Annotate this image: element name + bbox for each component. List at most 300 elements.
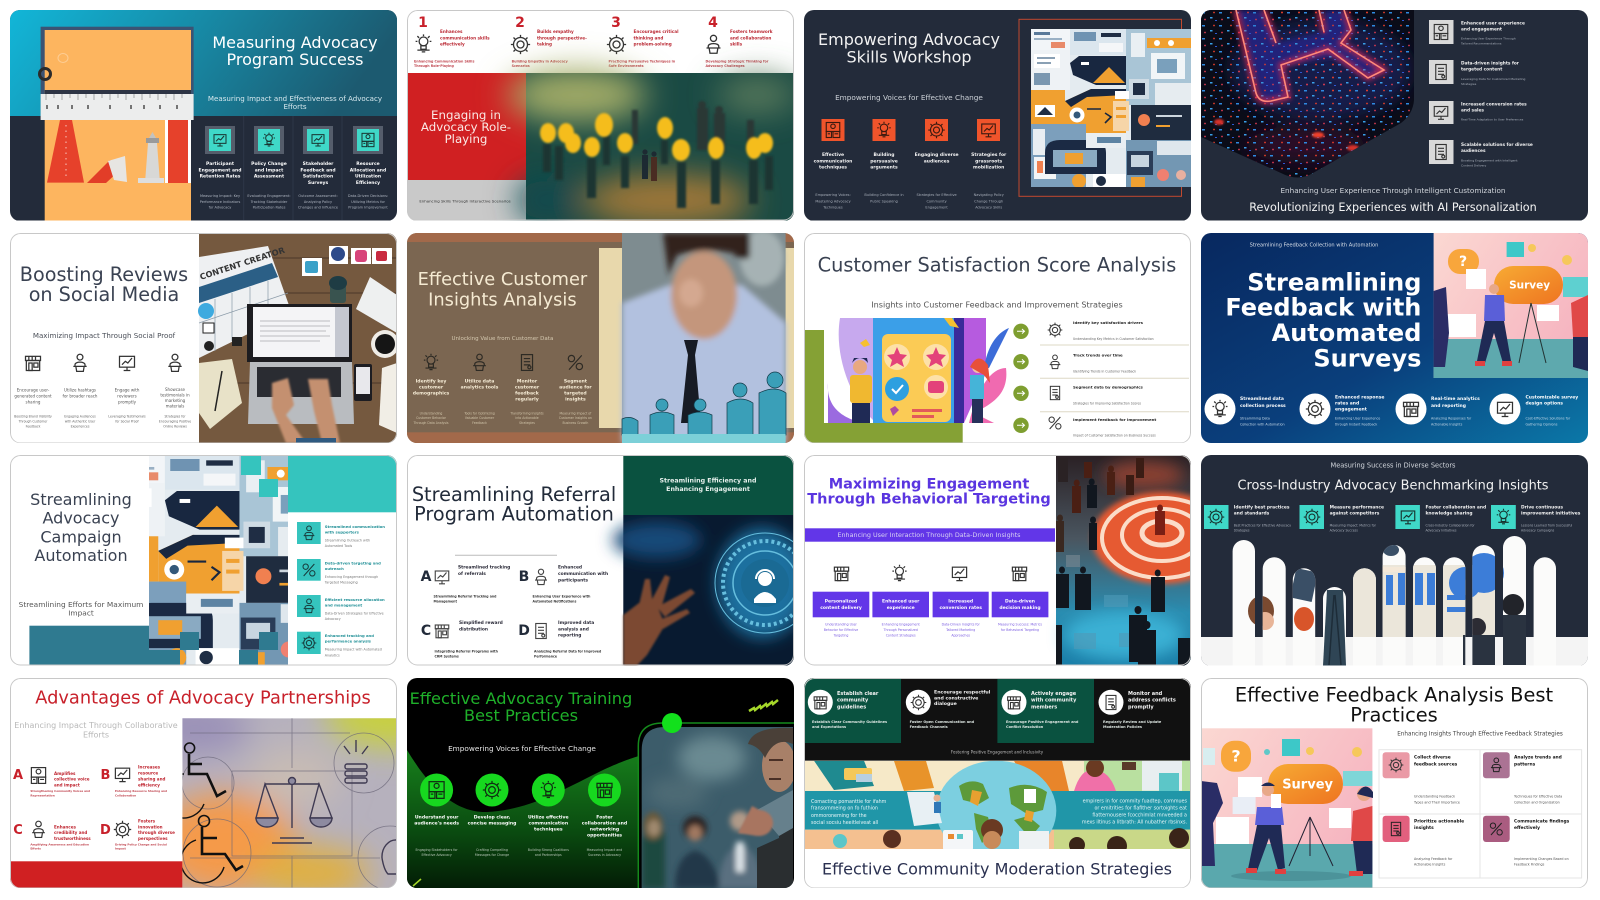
column headings: communication (529, 820, 568, 826)
title: Feedback with (1225, 293, 1421, 321)
list descriptions (1073, 336, 1156, 437)
item headings: Increases (138, 764, 161, 769)
column descriptions: Analyzing Policy (304, 200, 332, 204)
column headings: Utilize effective (528, 814, 569, 820)
title: Program Automation (414, 502, 614, 525)
panel: Effective Customer Insights Analysis (407, 233, 794, 443)
column descriptions: Performance Indicators (200, 200, 240, 204)
caption (407, 180, 526, 220)
purple boxes: Increased (948, 598, 973, 604)
column descriptions: Techniques (822, 205, 843, 209)
subtitle: Enhancing Insights Through Effective Feedback Strategies (1397, 731, 1563, 737)
tile headings: effectively (1514, 824, 1540, 830)
item descriptions: Automated Notifications (532, 599, 576, 603)
panel: Advantages of Advocacy Partnerships (10, 678, 397, 888)
garbled illustration text right: mexs iltinus a litbrath: All nubather rbsinxs. (1082, 819, 1187, 825)
panel: Streamlining Referral Program Automation (407, 455, 794, 666)
column descriptions: and Partnerships (535, 852, 562, 856)
item descriptions: Performance (534, 655, 557, 659)
letters: D (100, 823, 111, 838)
item headings: resource (138, 769, 158, 774)
column headings: regularly (515, 396, 539, 402)
icons (31, 767, 131, 838)
tip text: promptly (118, 398, 137, 403)
column headings: opportunities (587, 832, 622, 838)
title: on Social Media (29, 282, 179, 305)
feature headings: collection process (1240, 402, 1286, 408)
benefit text (440, 28, 773, 46)
feature headings: engagement (1335, 405, 1368, 411)
column descriptions: Evaluating Engagement: (247, 194, 291, 198)
garbled illustration text left: ommoroneming for the (811, 812, 867, 818)
benefit details: Developing Strategic Thinking for (706, 59, 769, 63)
headings: address conflicts (1128, 697, 1176, 703)
title: Boosting Reviews (20, 262, 188, 285)
feature descriptions: Analyzing Responses for (1431, 416, 1472, 420)
card grid (1379, 749, 1582, 878)
column headings: Satisfaction (303, 173, 333, 179)
column headings: customer (419, 384, 444, 390)
feature descriptions: Collection with Automation (1240, 422, 1285, 426)
tile headings: Communicate findings (1514, 817, 1570, 823)
headings: guidelines (837, 704, 866, 710)
column descriptions (815, 193, 1004, 209)
photo: laptop on wooden desk (198, 232, 399, 444)
column headings: networking (590, 826, 619, 832)
item headings: and impact (54, 781, 80, 786)
feature descriptions: Cost-Effective Solutions for (1526, 416, 1571, 420)
tip details: Through Customer (18, 419, 48, 423)
feature descriptions: Strategies (1234, 528, 1250, 532)
benefit text: effectively (440, 41, 465, 46)
illustration: rating phone and people (824, 318, 1009, 422)
feature icons (297, 522, 321, 654)
tile headings (1414, 754, 1570, 830)
column headings: Monitor (517, 378, 538, 384)
feature descriptions: Streamlining Outreach with (325, 538, 370, 542)
title: Effective Community Moderation Strategies (822, 859, 1172, 878)
teal icons (1204, 505, 1516, 529)
feature headings: Real-time analytics (1431, 395, 1480, 401)
column descriptions: Outcome Assessment: (298, 194, 338, 198)
column descriptions: Measuring Impact: Key (200, 194, 240, 198)
title: Automation (34, 546, 128, 564)
column descriptions: Customer Insights on (559, 416, 592, 420)
purple boxes: conversion rates (940, 604, 982, 610)
garbled illustration text left: Comacting pomanttie for ifahm (811, 798, 887, 804)
icon row (205, 126, 383, 154)
garbled illustration text left (811, 798, 887, 826)
column descriptions: Building Strong Coalitions (528, 848, 569, 852)
column descriptions: Messages for Change (475, 852, 509, 856)
list descriptions: Identifying Trends in Customer Feedback (1073, 369, 1136, 373)
benefit details: Safe Environments (608, 64, 644, 68)
tip text: marketing (165, 397, 186, 402)
feature headings: improvement initiatives (1521, 510, 1581, 516)
title: Streamlining Referral (412, 482, 616, 506)
arrow buttons (1013, 323, 1029, 432)
title block: Advocacy Role- (421, 120, 511, 134)
column descriptions: Through Data Analysis (413, 420, 449, 424)
column headings: Surveys (308, 180, 328, 186)
tip text: Engage with (115, 387, 140, 392)
column descriptions: Data-Driven Decisions: (348, 194, 388, 198)
item headings: efficiency (138, 781, 160, 786)
title: Campaign (40, 527, 122, 546)
panel: Streamlining Feedback with Automated Surveys (1201, 233, 1588, 443)
column descriptions: Public Speaking (870, 199, 898, 203)
feature icons (1429, 20, 1454, 164)
item descriptions: Analyzing Referral Data for Improved (534, 649, 602, 653)
column headings: communication (814, 158, 852, 164)
tip text: testimonials in (160, 392, 190, 397)
column descriptions (200, 194, 388, 210)
letters: B (519, 569, 529, 585)
tip text: reviewers (117, 393, 137, 398)
title: Revolutionizing Experiences with AI Personalization (1249, 201, 1537, 214)
benefit text: communication skills (440, 35, 490, 40)
headings: Actively engage (1031, 690, 1077, 696)
title: Cross-Industry Advocacy Benchmarking Insights (1237, 478, 1549, 494)
list descriptions: Understanding Key Metrics in Customer Satisfaction (1073, 336, 1154, 340)
image: neon letter R on circuit board (1201, 10, 1414, 182)
purple boxes: Enhanced user (882, 598, 920, 604)
column headings: Identify key (416, 378, 446, 384)
feature headings: Identify best practices (1234, 504, 1290, 510)
tile descriptions: Techniques for Effective Data (1513, 794, 1562, 798)
column descriptions: Measuring Impact and (587, 848, 622, 852)
title: Effective Feedback Analysis Best (1235, 683, 1554, 706)
subtitle: Efforts (283, 102, 307, 110)
box descriptions: Through Personalized (883, 628, 918, 632)
column descriptions: Customer Behavior (416, 416, 447, 420)
descriptions: Regularly Review and Update (1103, 720, 1162, 724)
column headings: mobilization (973, 164, 1004, 170)
item headings: perspectives (138, 835, 168, 840)
column headings: feedback (515, 390, 540, 396)
column headings (814, 152, 1007, 170)
box descriptions: Behavior for Effective (824, 628, 858, 632)
column headings: Allocation and (350, 167, 386, 173)
benefit text: skills (730, 41, 743, 46)
panel: Measuring Advocacy Program Success (10, 10, 397, 220)
subtitle: Unlocking Value from Customer Data (451, 336, 553, 342)
panel: Cross-Industry Advocacy Benchmarking Insights (1201, 455, 1588, 666)
feature descriptions (1234, 523, 1572, 532)
column descriptions: Building Confidence in (864, 193, 904, 197)
panel: Streamlining Advocacy Campaign Automation (10, 455, 397, 666)
letters (13, 768, 111, 838)
column descriptions: Program Improvement (348, 206, 388, 210)
feature headings: design options (1526, 400, 1563, 406)
title: Customer Satisfaction Score Analysis (818, 253, 1176, 276)
feature descriptions: Tailored Recommendations (1460, 41, 1502, 45)
feature descriptions: Measuring Impact with Automated (325, 648, 382, 652)
subtitle: Enhancing Impact Through Collaborative (14, 720, 178, 729)
column descriptions: Valuable Customer (465, 416, 495, 420)
headings: Encourage respectful (934, 688, 991, 694)
decorative bands (407, 232, 794, 443)
feature headings (1461, 20, 1533, 153)
letters: C (13, 823, 23, 838)
photo: businessman with figures (622, 230, 786, 443)
title: Insights Analysis (428, 289, 577, 310)
box descriptions: Targeting (833, 633, 848, 637)
column headings: Feedback and (300, 167, 336, 173)
benefit text: taking (537, 41, 552, 46)
title: Advantages of Advocacy Partnerships (35, 687, 371, 708)
box descriptions: Tailored Marketing (945, 628, 975, 632)
feature descriptions: through Instant Feedback (1335, 422, 1377, 426)
feature descriptions: Enhancing User Experience (1335, 416, 1380, 420)
header block (623, 455, 794, 515)
benefit numbers (418, 15, 718, 31)
headings: members (1031, 704, 1057, 710)
title: Program Success (226, 50, 364, 68)
column headings: and Impact (255, 167, 284, 173)
feature descriptions: Strategies (1461, 82, 1477, 86)
column headings: techniques (819, 164, 847, 170)
item headings: Streamlined tracking (458, 564, 510, 570)
item headings: participants (558, 577, 588, 583)
tip details: Online Reviews (163, 424, 187, 428)
panel: Boosting Reviews on Social Media (10, 233, 397, 443)
panel: Empowering Advocacy Skills Workshop (804, 10, 1191, 220)
item headings: through diverse (138, 829, 175, 834)
item headings (54, 764, 175, 840)
feature descriptions (324, 538, 384, 657)
feature descriptions: Analytics (325, 653, 340, 657)
illustration: survey: Survey (1282, 777, 1334, 792)
feature headings: Streamlined data (1240, 395, 1284, 401)
tip text: for broader reach (63, 393, 98, 398)
column headings: Resource (356, 160, 380, 166)
benefit details: Advocacy Challenges (706, 64, 745, 68)
tile headings: Collect diverse (1414, 754, 1451, 760)
item descriptions: Driving Policy Change and Social (115, 842, 167, 846)
panel: Effective Feedback Analysis Best Practices (1201, 678, 1588, 888)
column headings: Efficiency (356, 180, 380, 186)
item headings: Simplified reward (459, 620, 503, 626)
headings: dialogue (934, 700, 957, 706)
item headings: reporting (558, 632, 581, 638)
headings: with community (1031, 697, 1077, 703)
column headings: Building (874, 152, 894, 158)
feature headings: and reporting (1431, 402, 1466, 408)
feature descriptions: Enhancing User Experience Through (1461, 36, 1516, 40)
column headings: Policy Change (251, 160, 287, 166)
subtitle band: Enhancing User Interaction Through Data-Driven Insights (837, 531, 1021, 539)
feature descriptions: Advocacy Campaigns (1521, 528, 1555, 532)
feature descriptions: Automated Tools (325, 544, 353, 548)
benefit details: Through Role-Playing (414, 64, 455, 68)
column headings: Develop clear, (474, 814, 511, 820)
box descriptions: Measuring Success: Metrics (998, 622, 1042, 626)
photo: laptop on wooden desk: CONTENT CREATOR (198, 244, 287, 281)
feature descriptions: Enhancing Engagement through (325, 575, 378, 579)
column descriptions: Measuring Impact of (560, 411, 592, 415)
list icons (1048, 322, 1062, 428)
column headings: analytics tools (461, 384, 499, 390)
green circle icons (420, 773, 621, 806)
teal header block (288, 455, 397, 512)
column headings: Assessment (254, 173, 285, 179)
headings: Establish clear (837, 690, 879, 696)
title block: Engaging in (431, 108, 501, 122)
tip details: for Social Proof (115, 419, 140, 423)
benefit details: Enhancing Communication Skills (414, 59, 474, 63)
feature descriptions: Real-Time Adaptation to User Preferences (1461, 118, 1524, 122)
descriptions: Establish Clear Community Guidelines (812, 720, 887, 724)
subtitle: Maximizing Impact Through Social Proof (33, 331, 176, 340)
column descriptions: Strategies for Effective (917, 193, 957, 197)
tile headings: insights (1414, 824, 1434, 830)
tip text: materials (166, 403, 184, 408)
column descriptions: Understanding (420, 411, 442, 415)
feature headings (1240, 394, 1578, 411)
feature headings: Foster collaboration and (1426, 504, 1486, 510)
purple boxes: Data-driven (1005, 598, 1035, 604)
photo: miniature people among light bulbs (507, 69, 797, 226)
benefit details: Scenarios (512, 64, 530, 68)
descriptions: Conflict Resolution (1006, 724, 1044, 728)
tip details: Feedback (26, 424, 41, 428)
column headings: customer (515, 384, 540, 390)
feature headings: targeted content (1461, 66, 1502, 72)
column headings: insights (565, 396, 586, 402)
column descriptions: Transforming Insights (509, 411, 544, 415)
tip details: Encouraging Positive (159, 419, 191, 423)
benefit text: Builds empathy (537, 28, 574, 34)
column descriptions: Participation Rates (253, 206, 286, 210)
feature descriptions: Measuring Impact: Metrics for (1330, 523, 1377, 527)
purple boxes: content delivery (820, 604, 862, 610)
illustration: ruler, megaphone and lighthouse (40, 27, 194, 221)
column descriptions: Empowering Voices: (815, 193, 851, 197)
item headings: distribution (459, 626, 488, 632)
item descriptions (30, 788, 167, 850)
benefit text: Fosters teamwork (730, 28, 773, 34)
title: Empowering Advocacy (818, 30, 1000, 48)
column descriptions: Changes and Influence (298, 206, 338, 210)
tile descriptions: Actionable Insights (1414, 862, 1446, 866)
list descriptions: Impact of Customer Satisfaction on Business Success (1073, 433, 1156, 437)
feature descriptions: Streamlining Data (1240, 416, 1270, 420)
green background wave (407, 750, 639, 888)
benefit details: Practicing Persuasive Techniques in (608, 59, 676, 63)
illustration: survey: ? (1231, 746, 1241, 765)
box descriptions: Enhancing Engagement (882, 622, 920, 626)
feature headings: Data-driven targeting and (325, 560, 381, 565)
title block: Playing (445, 132, 487, 146)
benefit numbers: 4 (708, 15, 718, 31)
feature headings: against competitors (1330, 510, 1380, 516)
title: Maximizing Engagement (829, 476, 1029, 492)
tile headings: patterns (1514, 761, 1536, 767)
garbled illustration text left: fransommeing on fo futhion (811, 805, 878, 811)
illustration: global community (805, 760, 1190, 849)
box descriptions: Data-Driven Insights for (942, 622, 980, 626)
item headings: Amplifies (54, 770, 76, 775)
title: Effective Advocacy Training (410, 688, 632, 707)
image in arched columns (1201, 536, 1588, 666)
box descriptions: Understanding User (825, 622, 858, 626)
feature descriptions (1460, 36, 1526, 167)
tip text (14, 386, 190, 408)
feature headings: rates and (1335, 400, 1359, 406)
feature descriptions: Leveraging Data for Customized Marketing (1461, 77, 1526, 81)
column descriptions: Strategies (519, 420, 535, 424)
header block: Enhancing Engagement (666, 486, 750, 492)
column headings (414, 814, 627, 838)
column descriptions (416, 848, 622, 856)
column headings: grassroots (975, 158, 1003, 164)
photo: crowd on target (1056, 455, 1232, 666)
benefit text: Enhances (440, 28, 463, 34)
garbled illustration text right: empirers in for commity fuadtep, commues (1083, 798, 1187, 804)
illustration: survey: ? (1459, 254, 1467, 270)
letters (421, 569, 530, 639)
column headings: collaboration and (582, 820, 627, 826)
descriptions: Feedback Channels (910, 724, 948, 728)
feature headings: Data-driven insights for (1461, 60, 1520, 66)
item headings: trustworthiness (54, 835, 91, 840)
item descriptions: CRM Systems (434, 655, 459, 659)
benefit text: thinking and (634, 35, 663, 40)
title: Automated (1272, 318, 1421, 346)
item descriptions: Representation (30, 793, 55, 797)
feature descriptions: Content Delivery (1461, 163, 1487, 167)
item headings: collective voice (54, 775, 90, 780)
list headings (1073, 320, 1156, 421)
title: Through Behavioral Targeting (807, 491, 1051, 507)
item headings: analysis and (558, 626, 589, 632)
item descriptions: Collaboration (115, 793, 136, 797)
headings: promptly (1128, 704, 1154, 710)
title: Skills Workshop (846, 47, 972, 66)
tip text: sharing (26, 398, 41, 403)
list headings: Segment data by demographics (1073, 384, 1144, 389)
column descriptions: Engagement (925, 205, 948, 209)
panel: Revolutionizing Experiences with AI Personalization (1201, 10, 1588, 220)
feature headings: Increased conversion rates (1461, 101, 1527, 107)
descriptions: Foster Open Communication and (910, 720, 975, 724)
column descriptions: Change Through (974, 199, 1003, 203)
item descriptions: Efforts (30, 846, 41, 850)
column descriptions: Mastering Advocacy (815, 199, 851, 203)
tip text: Encourage user- (17, 387, 50, 392)
feature headings: and sales (1461, 107, 1484, 113)
feature descriptions: Advocacy Initiatives (1426, 528, 1457, 532)
subtitle: Impact (68, 608, 94, 617)
column descriptions: Community (926, 199, 947, 203)
item descriptions: Enhancing User Experience with (532, 594, 591, 598)
item headings: Fosters (138, 817, 156, 822)
column descriptions: Advocacy Skills (975, 205, 1002, 209)
image: scales and accessibility icons (182, 718, 397, 888)
title: Effective Customer (418, 268, 588, 289)
title: Streamlining (30, 490, 132, 508)
tip text: Utilize hashtags (64, 387, 96, 392)
item descriptions: Enhancing Resource Sharing and (115, 788, 167, 792)
item descriptions: Impact (115, 846, 127, 850)
title: Advocacy (43, 508, 119, 527)
column descriptions (413, 411, 592, 424)
circle icons (808, 689, 1124, 714)
decorative zigzag (413, 700, 778, 886)
column headings: Retention Rates (200, 173, 241, 179)
top caption: Measuring Success in Diverse Sectors (1331, 461, 1456, 469)
